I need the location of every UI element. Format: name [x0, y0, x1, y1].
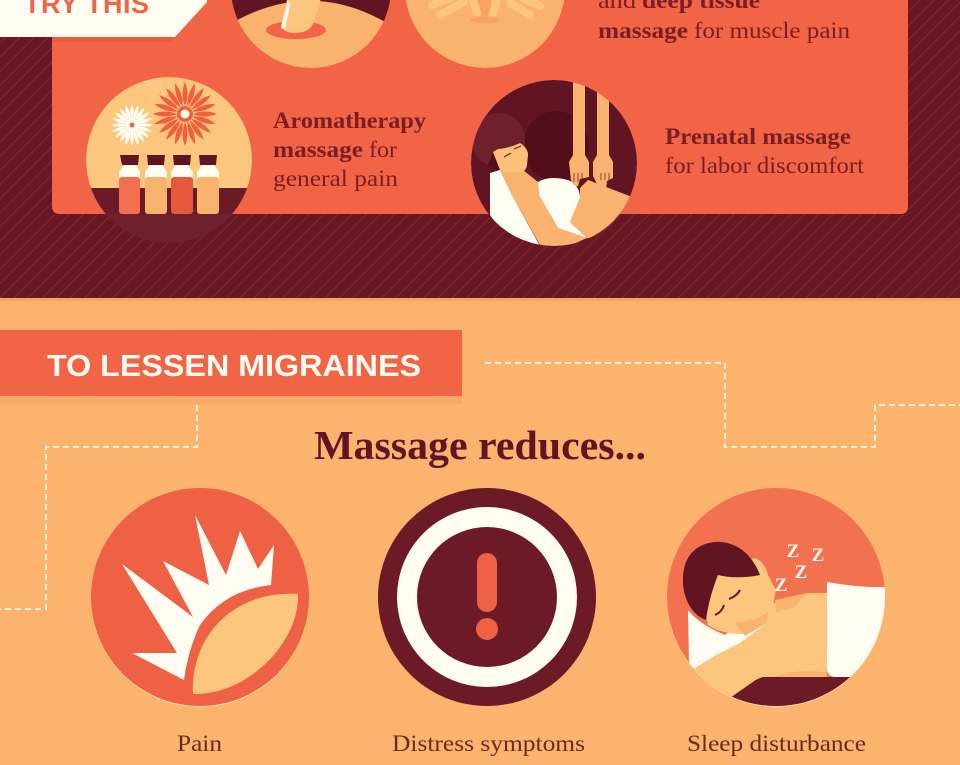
dark striped section — [0, 0, 960, 298]
banner: to lessen migraines — [0, 330, 462, 404]
panel: try this — [0, 0, 908, 250]
text: aromatherapy massage: general pain — [273, 166, 399, 191]
zzz letters — [775, 541, 824, 596]
section edge shadow — [0, 298, 960, 301]
icon: sleep disturbance — [667, 488, 885, 707]
text: prenatal massage — [665, 124, 865, 178]
icon: pain burst — [91, 488, 309, 707]
icon: hands — [405, 0, 565, 68]
text: aromatherapy massage: for — [369, 137, 397, 162]
banner: to lessen migraines: TO LESSEN MIGRAINES — [47, 348, 421, 383]
zzz letters: Z — [787, 541, 799, 562]
text: aromatherapy massage: Aromatherapy — [273, 108, 427, 133]
heading: massage reduces: Massage reduces... — [314, 422, 646, 468]
dashed path right — [485, 363, 960, 447]
text: deep tissue massage: for muscle pain — [694, 18, 851, 43]
dashed path left — [0, 405, 197, 609]
zzz letters: Z — [812, 545, 824, 566]
text: aromatherapy massage: massage — [273, 137, 363, 162]
label: sleep disturbance: Sleep disturbance — [687, 731, 866, 756]
bottles — [119, 155, 219, 214]
icon: aromatherapy bottles — [86, 77, 252, 243]
icon: finger pressing — [225, 0, 395, 68]
icon: white flower — [111, 104, 153, 146]
zzz letters: Z — [775, 575, 787, 596]
icon: coral flower — [153, 82, 217, 146]
zzz letters: Z — [795, 562, 807, 583]
text: prenatal massage: for labor discomfort — [665, 153, 865, 178]
text: aromatherapy massage — [273, 108, 427, 191]
label: pain: Pain — [177, 731, 223, 756]
icon: distress exclamation — [378, 488, 596, 706]
text: prenatal massage: Prenatal massage — [665, 124, 851, 149]
banner: try this — [0, 0, 207, 42]
label: distress symptoms: Distress symptoms — [392, 731, 585, 756]
icon: prenatal massage — [471, 75, 640, 250]
text: deep tissue massage — [598, 0, 851, 43]
text: deep tissue massage: massage — [598, 18, 688, 43]
